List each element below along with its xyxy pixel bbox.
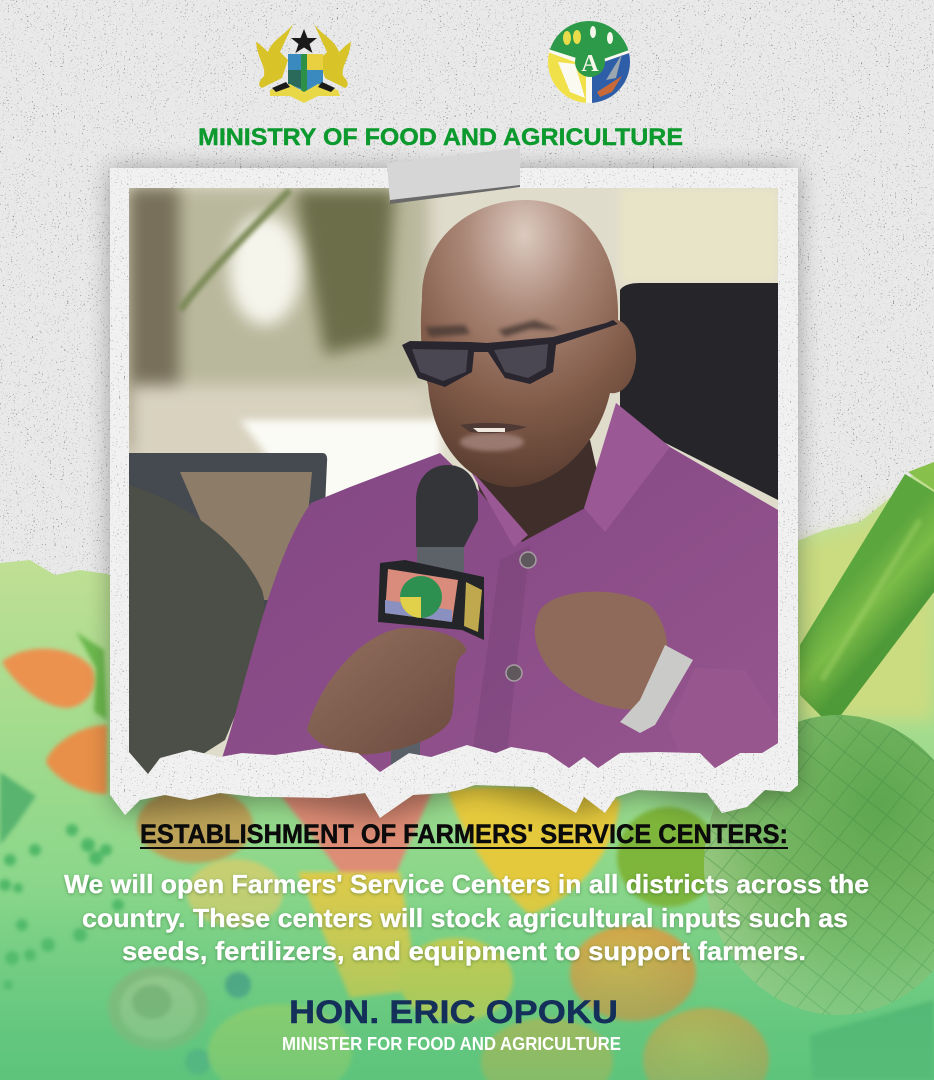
body text: seeds, fertilizers, and equipment to support farmers.: [122, 936, 806, 966]
strawberry lower: [46, 725, 107, 794]
brown fruit behind heading: [137, 787, 253, 863]
photo background: [129, 188, 778, 788]
shirt shadow placket: [474, 546, 530, 753]
green fade over fruit: [0, 880, 934, 1080]
right eagle: [314, 24, 351, 88]
green torn-paper lower background: [0, 462, 934, 1080]
lime: [617, 807, 719, 907]
strawberry upper: [2, 632, 107, 720]
neck: [476, 440, 596, 542]
mushroom: [108, 966, 208, 1050]
star: [291, 29, 317, 53]
microphone: [378, 465, 484, 775]
ministry logo: A: [581, 51, 599, 77]
tomato centre: [570, 925, 696, 1021]
motto ribbon: [270, 82, 340, 103]
head: [421, 200, 636, 487]
fist on chest: [535, 592, 668, 710]
purple shirt: [222, 403, 778, 790]
hand holding mic: [307, 628, 466, 754]
sleeve cuff: [680, 743, 778, 768]
adhesive tape: [387, 148, 520, 204]
body text: [64, 869, 869, 966]
body text: We will open Farmers' Service Centers in all districts across the: [64, 869, 869, 899]
bananas: [448, 787, 620, 915]
minister name: HON. ERIC OPOKU: [289, 994, 618, 1030]
peas: [0, 824, 124, 990]
fruit shapes: [0, 632, 934, 1080]
green bottle: [800, 462, 934, 727]
shield: [288, 54, 323, 92]
rhubarb stalks: [278, 792, 432, 878]
shirt buttons: [506, 552, 536, 681]
tomato lower: [643, 1008, 769, 1080]
pineapple: [704, 715, 934, 1015]
pale yellow fruit: [187, 859, 283, 927]
left eagle: [256, 24, 293, 88]
white photo frame: [105, 160, 805, 825]
pasta: [298, 872, 418, 998]
pale fruit lower left: [208, 1004, 352, 1080]
body text: country. These centers will stock agricultural inputs such as: [82, 903, 848, 933]
ministry logo: [548, 21, 630, 103]
eyebrows: [425, 320, 560, 337]
person on left: [129, 485, 264, 775]
fruit illustrations: [0, 462, 934, 1080]
minister role: MINISTER FOR FOOD AND AGRICULTURE: [282, 1034, 621, 1054]
section heading: ESTABLISHMENT OF FARMERS' SERVICE CENTERS:: [140, 819, 788, 849]
photo of the minister: [129, 188, 778, 790]
lower lip: [460, 433, 524, 451]
wristwatch: [620, 645, 693, 733]
leaf on left edge: [0, 772, 36, 845]
yellow fruit: [399, 938, 513, 1022]
fruit bottom middle: [481, 1018, 613, 1080]
dark green base right: [810, 1000, 934, 1080]
mouth: [460, 423, 527, 433]
black chair back: [620, 283, 778, 500]
Ghana coat of arms: [256, 24, 351, 103]
sunglasses: [402, 320, 618, 387]
title: MINISTRY OF FOOD AND AGRICULTURE: [198, 124, 683, 151]
collar: [470, 403, 670, 547]
left chair: [129, 453, 327, 620]
